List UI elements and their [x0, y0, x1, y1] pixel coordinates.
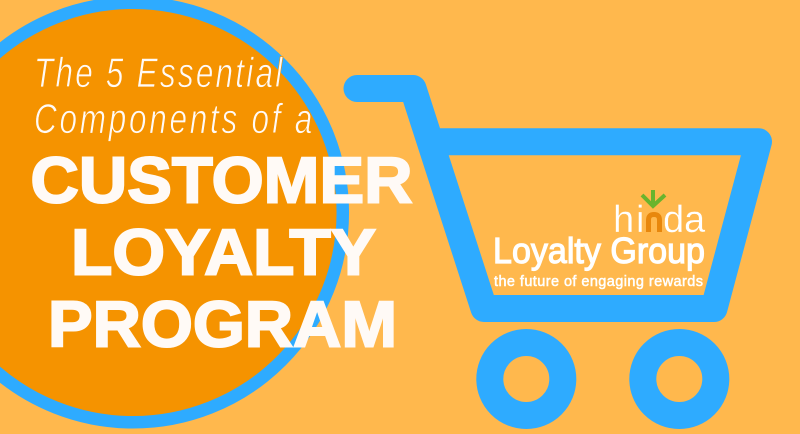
- left wheel: [490, 342, 563, 416]
- heading line 3: PROGRAM: [48, 288, 397, 360]
- logo wordmark hinda: a: [684, 199, 706, 241]
- logo wordmark hinda: d: [663, 199, 684, 241]
- logo: Hinda Loyalty Group: [493, 190, 706, 290]
- logo wordmark hinda: i: [636, 199, 644, 241]
- right wheel: [643, 342, 716, 416]
- icon: shopping cart: [357, 88, 758, 416]
- subtitle line 2: Components of a: [34, 95, 312, 142]
- title: [30, 49, 413, 361]
- logo wordmark hinda: h: [613, 199, 634, 241]
- heading line 1: CUSTOMER: [30, 144, 413, 216]
- logo name: Loyalty Group: [493, 230, 705, 271]
- logo orange n: [648, 214, 660, 232]
- cart handle and basket outline: [357, 88, 758, 308]
- logo sprout icon: [642, 190, 665, 206]
- heading line 2: LOYALTY: [71, 216, 376, 288]
- subtitle line 1: The 5 Essential: [34, 49, 284, 96]
- logo tagline: the future of engaging rewards: [494, 274, 703, 290]
- circle badge: [0, 3, 343, 422]
- logo wordmark hinda: [613, 199, 706, 241]
